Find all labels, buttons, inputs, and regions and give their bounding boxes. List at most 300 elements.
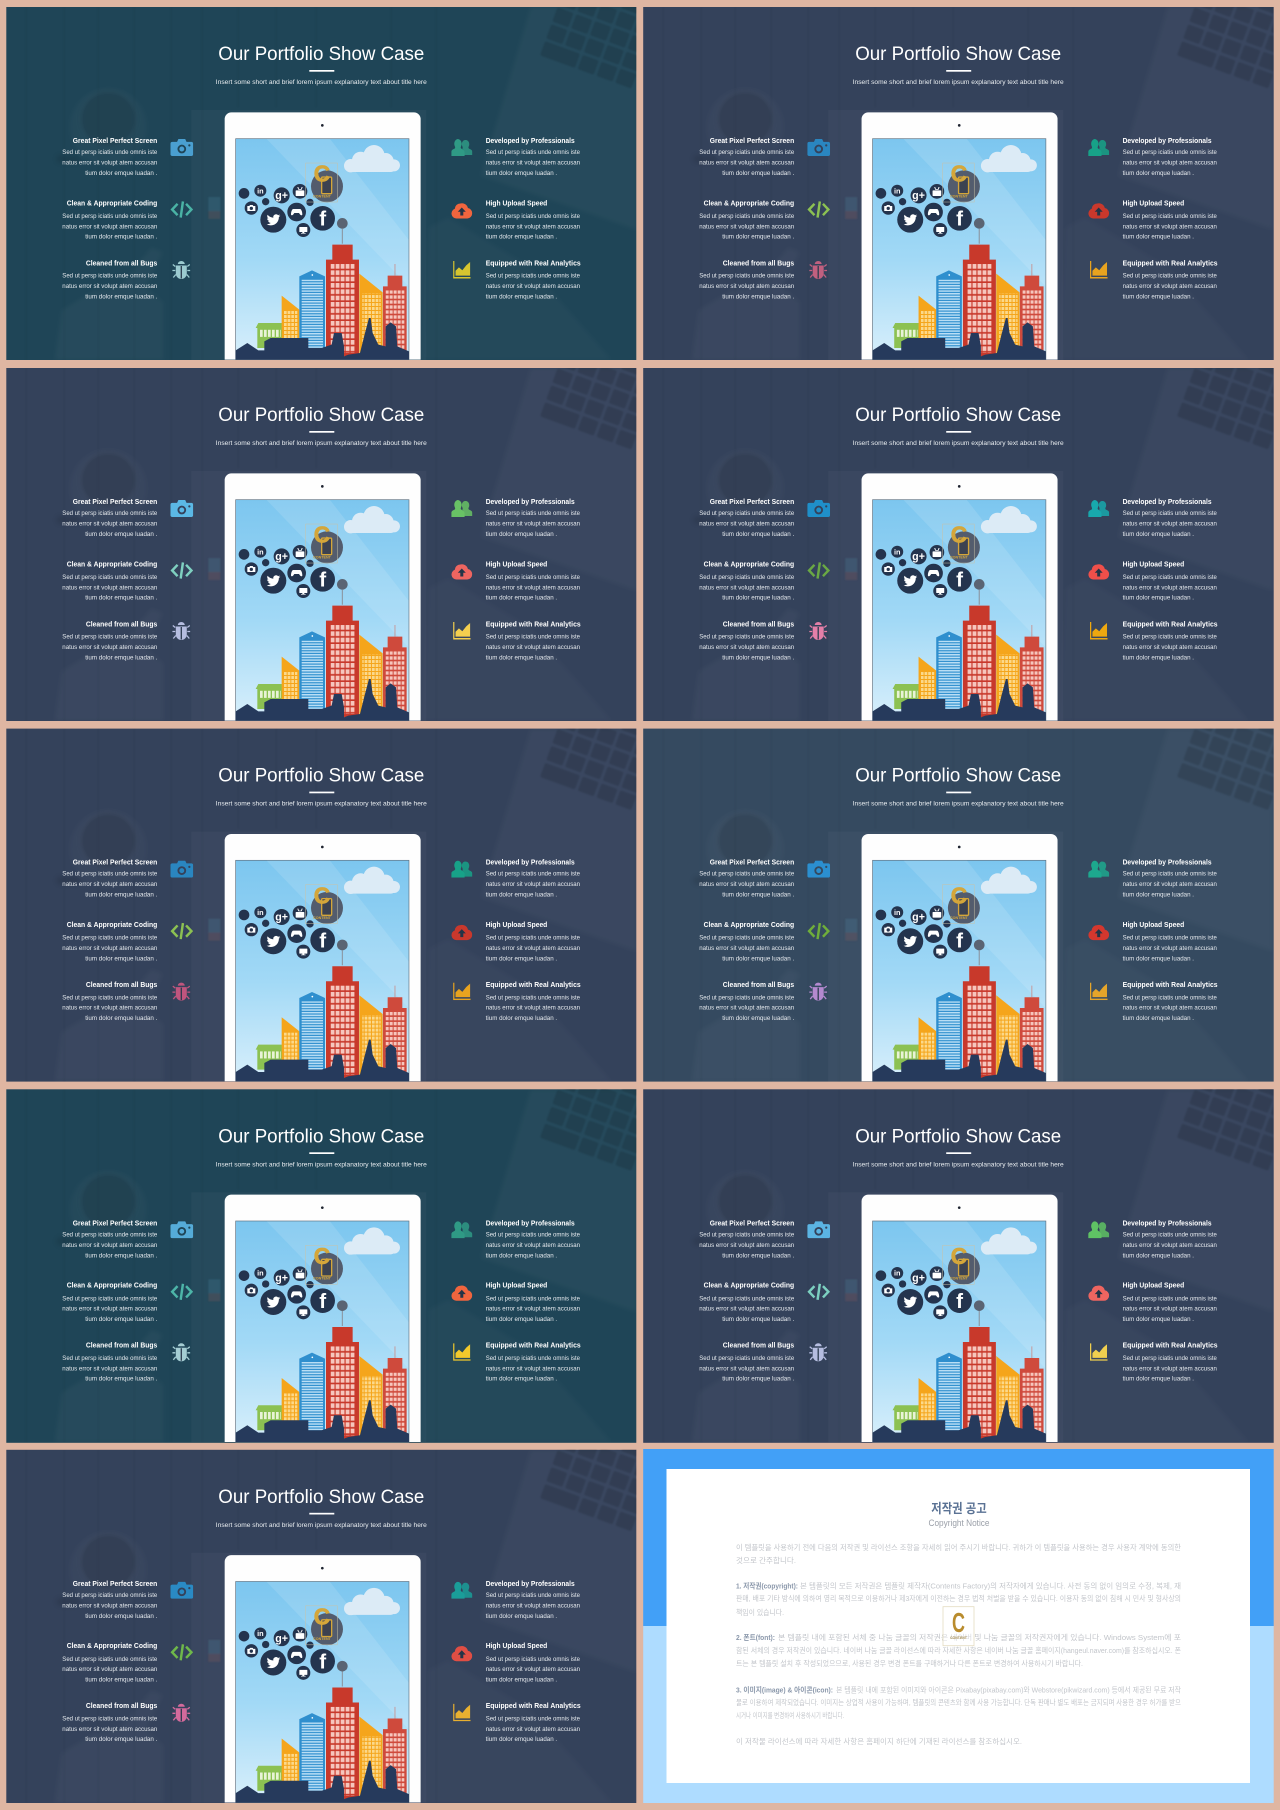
panel: copyright notice [643,1449,1274,1803]
tablet with city illustration: g+ [275,1633,288,1645]
feature: clean coding: Clean & Appropriate Coding [67,1641,158,1650]
feature: pixel perfect screen: tium dolor emque luadan . [85,170,158,177]
title underline [309,792,334,793]
feature: clean coding [699,920,828,962]
title: Our Portfolio Show Case [218,765,424,787]
feature: clean coding: tium dolor emque luadan . [85,1316,158,1323]
title underline [309,70,334,72]
feature: real analytics [1090,258,1218,300]
feature: cleaned from bugs: natus error sit volupt atem accusan [62,1726,158,1733]
feature: clean coding: Clean & Appropriate Coding [704,559,795,568]
panel: slide 3 [6,335,661,721]
feature: cleaned from bugs: Sed ut persp iciatis unde omnis iste [699,634,795,641]
feature: developed by professionals: Developed by Professionals [1123,497,1212,506]
feature: clean coding [62,1641,191,1684]
feature: real analytics [453,1341,581,1383]
feature: pixel perfect screen: Great Pixel Perfect Screen [710,497,795,506]
feature: pixel perfect screen: Great Pixel Perfect Screen [73,1218,158,1227]
tablet with city illustration: in [894,186,901,195]
tablet with city illustration: CONTENT [313,1637,332,1641]
feature: developed by professionals: natus error sit volupt atem accusan [1123,1242,1217,1249]
feature: clean coding: Clean & Appropriate Coding [704,198,795,207]
feature: developed by professionals [451,497,581,538]
notice text: 본 템플릿 내에 포함된 서체 중 나눔 글꼴의 저작권은 네이버 및 나눔 글꼴의 저작권자에게 있습니다. Windows System에 포 [778,1632,1181,1642]
feature: developed by professionals: natus error sit volupt atem accusan [486,520,581,528]
logo watermark: CONTENT [950,1636,968,1640]
feature: cleaned from bugs: Sed ut persp iciatis unde omnis iste [62,273,158,280]
feature: developed by professionals: Sed ut persp iciatis unde omnis iste [486,1592,581,1599]
slide background photo [6,0,661,360]
tablet with city illustration [225,473,421,721]
feature: pixel perfect screen: natus error sit volupt atem accusan [699,881,795,888]
feature: cleaned from bugs: Cleaned from all Bugs [723,1341,794,1350]
feature: real analytics: tium dolor emque luadan . [486,1015,557,1022]
tablet with city illustration: C [951,522,967,548]
feature: cleaned from bugs: tium dolor emque luadan . [722,654,794,661]
tablet with city illustration [225,1195,421,1442]
slide background photo [6,695,661,1082]
feature: cleaned from bugs: Cleaned from all Bugs [86,619,157,628]
title underline [946,792,971,793]
feature: real analytics: tium dolor emque luadan . [1123,1015,1194,1022]
tablet with city illustration: C [314,522,330,548]
feature: pixel perfect screen [699,1218,830,1259]
feature: clean coding [62,198,191,241]
feature: cleaned from bugs: natus error sit volupt atem accusan [62,283,158,290]
tablet with city illustration: CONTENT [313,555,332,559]
tablet with city illustration: in [257,1269,264,1278]
feature: high upload speed: tium dolor emque luadan . [1123,595,1194,602]
feature: high upload speed: tium dolor emque luadan . [486,955,557,962]
feature: cleaned from bugs [699,258,827,300]
tablet with city illustration: g+ [275,912,288,924]
tablet with city illustration: g+ [912,551,925,563]
feature: high upload speed: natus error sit volupt atem accusan [486,1306,581,1313]
panel: slide 4 [643,335,1280,721]
feature: pixel perfect screen: tium dolor emque luadan . [85,531,158,538]
feature: clean coding: natus error sit volupt atem accusan [699,945,795,952]
feature: real analytics: Sed ut persp iciatis unde omnis iste [1123,994,1217,1001]
feature: developed by professionals: Sed ut persp iciatis unde omnis iste [486,149,581,156]
feature: clean coding: natus error sit volupt atem accusan [62,945,158,952]
feature: developed by professionals [451,1218,581,1259]
feature: developed by professionals: Sed ut persp iciatis unde omnis iste [486,1231,581,1238]
feature: clean coding: tium dolor emque luadan . [722,234,794,241]
feature: real analytics: Sed ut persp iciatis unde omnis iste [486,994,581,1001]
feature: clean coding [699,198,828,241]
tablet with city illustration: CONTENT [313,916,332,920]
feature: developed by professionals: tium dolor emque luadan . [1123,1252,1194,1259]
feature: cleaned from bugs: Cleaned from all Bugs [86,258,157,267]
feature: high upload speed: tium dolor emque luadan . [486,1677,557,1684]
tablet with city illustration [862,112,1058,360]
feature: clean coding: natus error sit volupt atem accusan [699,1306,795,1313]
feature: clean coding: Clean & Appropriate Coding [67,920,158,929]
feature: developed by professionals [451,1579,581,1620]
feature: real analytics: Equipped with Real Analytics [1123,619,1218,628]
sub heading: Copyright Notice [928,1518,990,1528]
feature: real analytics: natus error sit volupt atem accusan [486,1005,581,1012]
heading: 저작권 공고 [931,1501,987,1516]
tablet with city illustration: in [257,186,264,195]
feature: pixel perfect screen: natus error sit volupt atem accusan [62,1242,158,1249]
feature: real analytics [1090,980,1218,1022]
feature: high upload speed: natus error sit volupt atem accusan [486,223,581,230]
feature: cleaned from bugs: Sed ut persp iciatis unde omnis iste [699,994,795,1001]
feature: cleaned from bugs: Cleaned from all Bugs [86,980,157,989]
feature: real analytics: Equipped with Real Analytics [1123,258,1218,267]
feature: pixel perfect screen: tium dolor emque luadan . [722,1252,794,1259]
feature: high upload speed: Sed ut persp iciatis unde omnis iste [486,1295,581,1302]
feature: real analytics: Equipped with Real Analytics [1123,1341,1218,1350]
feature: pixel perfect screen: Sed ut persp iciatis unde omnis iste [699,1231,795,1238]
panel: slide 6 [643,695,1280,1082]
tablet with city illustration: C [951,161,967,187]
feature: pixel perfect screen: Sed ut persp iciatis unde omnis iste [62,149,158,156]
feature: pixel perfect screen: natus error sit volupt atem accusan [62,160,158,166]
panel: slide 1 [6,0,661,360]
feature: developed by professionals [451,858,581,899]
feature: developed by professionals: tium dolor emque luadan . [486,531,557,538]
feature: clean coding: Clean & Appropriate Coding [67,559,158,568]
title: Our Portfolio Show Case [218,1125,424,1147]
feature: real analytics: Equipped with Real Analytics [486,258,581,267]
subtitle: Insert some short and brief lorem ipsum explanatory text about title here [216,1522,427,1529]
feature: real analytics [453,258,581,300]
feature: cleaned from bugs: tium dolor emque luadan . [85,293,158,300]
feature: cleaned from bugs: Sed ut persp iciatis unde omnis iste [699,273,795,280]
feature: high upload speed: Sed ut persp iciatis unde omnis iste [486,213,581,220]
feature: developed by professionals: Sed ut persp iciatis unde omnis iste [1123,149,1217,156]
feature: pixel perfect screen: Sed ut persp iciatis unde omnis iste [62,510,158,517]
feature: cleaned from bugs: Cleaned from all Bugs [723,980,794,989]
feature: cleaned from bugs: Sed ut persp iciatis unde omnis iste [62,1355,158,1362]
feature: high upload speed [1088,559,1217,602]
feature: developed by professionals: Developed by Professionals [486,858,575,867]
feature: clean coding: Clean & Appropriate Coding [67,198,158,207]
feature: clean coding [62,920,191,962]
feature: high upload speed: natus error sit volupt atem accusan [1123,945,1217,952]
notice text [736,1542,1181,1746]
tablet with city illustration: in [894,547,901,556]
tablet with city illustration: f [319,1290,326,1313]
tablet with city illustration: C [314,1603,330,1629]
tablet with city illustration: f [956,929,963,952]
feature: real analytics: Equipped with Real Analytics [486,980,581,989]
feature: cleaned from bugs: Sed ut persp iciatis unde omnis iste [62,634,158,641]
feature: high upload speed: tium dolor emque luadan . [1123,234,1194,241]
notice text: 본 템플릿 내에 포함된 이미지와 아이콘은 Pixabay(pixabay.com)와 Webstore(pikwizard.com) 등에서 제공된 무료 저작 [836,1684,1181,1694]
feature: cleaned from bugs: tium dolor emque luadan . [85,1376,158,1383]
tablet with city illustration: in [257,908,264,917]
subtitle: Insert some short and brief lorem ipsum explanatory text about title here [853,440,1064,447]
feature: pixel perfect screen [62,858,193,899]
tablet with city illustration: f [319,1650,326,1673]
feature: clean coding: Sed ut persp iciatis unde omnis iste [62,213,158,220]
feature: real analytics: natus error sit volupt atem accusan [486,283,581,290]
feature: developed by professionals: Sed ut persp iciatis unde omnis iste [1123,871,1217,878]
slide background photo [643,1056,1280,1443]
feature: real analytics: natus error sit volupt atem accusan [486,644,581,651]
feature: developed by professionals: natus error sit volupt atem accusan [486,160,581,166]
feature: pixel perfect screen: Great Pixel Perfect Screen [73,858,158,867]
tablet with city illustration: in [894,1269,901,1278]
notice text: 본 템플릿의 모든 저작권은 템플릿 제작자(Contents Factory)의 저작자에게 있습니다. 사전 동의 없이 임의로 수정, 복제, 재 [800,1580,1181,1590]
feature: developed by professionals: Developed by Professionals [486,1579,575,1588]
feature: cleaned from bugs: natus error sit volupt atem accusan [699,1365,795,1372]
white card [666,1469,1250,1783]
feature: pixel perfect screen: Sed ut persp iciatis unde omnis iste [699,510,795,517]
feature: real analytics [453,619,581,661]
slide background photo [6,1416,661,1803]
feature: real analytics: tium dolor emque luadan . [1123,654,1194,661]
feature: high upload speed [451,559,581,602]
feature: developed by professionals: tium dolor emque luadan . [1123,170,1194,177]
feature: pixel perfect screen: Great Pixel Perfect Screen [73,1579,158,1588]
feature: high upload speed: High Upload Speed [1123,920,1185,929]
feature: pixel perfect screen [62,1579,193,1620]
tablet with city illustration: g+ [275,1272,288,1284]
feature: real analytics: Equipped with Real Analytics [1123,980,1218,989]
tablet with city illustration: f [956,569,963,592]
title underline [309,1513,334,1514]
feature: clean coding: Sed ut persp iciatis unde omnis iste [62,1295,158,1302]
tablet with city illustration: g+ [912,1272,925,1284]
feature: high upload speed: tium dolor emque luadan . [486,1316,557,1323]
feature: high upload speed: tium dolor emque luadan . [1123,1316,1194,1323]
feature: cleaned from bugs: Sed ut persp iciatis unde omnis iste [62,1716,158,1723]
feature: pixel perfect screen [699,858,830,899]
feature: real analytics: tium dolor emque luadan . [1123,293,1194,300]
feature: pixel perfect screen: tium dolor emque luadan . [722,892,794,899]
subtitle: Insert some short and brief lorem ipsum explanatory text about title here [853,801,1064,808]
tablet with city illustration: C [314,882,330,908]
feature: cleaned from bugs: tium dolor emque luadan . [85,1736,158,1743]
feature: clean coding: Clean & Appropriate Coding [67,1281,158,1290]
feature: high upload speed [451,1641,581,1684]
feature: developed by professionals: Developed by Professionals [1123,136,1212,145]
tablet with city illustration: in [257,1629,264,1638]
feature: cleaned from bugs: tium dolor emque luadan . [722,293,794,300]
notice text: 책임이 있습니다. [736,1607,784,1617]
feature: clean coding [699,1281,828,1323]
slide background photo [643,335,1280,721]
notice text: 이 템플릿을 사용하기 전에 다음의 저작권 및 라이선스 조항을 자세히 읽어 주시기 바랍니다. 귀하가 이 템플릿을 사용하는 경우 사용자 계약에 동의한 [736,1542,1181,1552]
feature: cleaned from bugs [62,258,190,300]
tablet with city illustration: CONTENT [950,194,968,198]
feature: high upload speed: tium dolor emque luadan . [486,595,557,602]
feature: cleaned from bugs: Cleaned from all Bugs [723,258,794,267]
feature: pixel perfect screen: tium dolor emque luadan . [85,892,158,899]
feature: developed by professionals: natus error sit volupt atem accusan [1123,160,1217,166]
feature: developed by professionals: natus error sit volupt atem accusan [486,1602,581,1609]
tablet with city illustration: C [314,161,330,187]
feature: cleaned from bugs: Cleaned from all Bugs [723,619,794,628]
feature: cleaned from bugs [62,1341,190,1383]
feature: pixel perfect screen: tium dolor emque luadan . [85,1252,158,1259]
logo watermark [943,1607,974,1646]
feature: high upload speed: Sed ut persp iciatis unde omnis iste [1123,574,1217,581]
panel: slide 9 [6,1416,661,1803]
feature: pixel perfect screen: Sed ut persp iciatis unde omnis iste [699,149,795,156]
feature: pixel perfect screen: Sed ut persp iciatis unde omnis iste [62,871,158,878]
feature: high upload speed: Sed ut persp iciatis unde omnis iste [486,574,581,581]
feature: developed by professionals: tium dolor emque luadan . [1123,531,1194,538]
feature: cleaned from bugs [62,1701,190,1743]
feature: pixel perfect screen: Great Pixel Perfect Screen [73,497,158,506]
notice text: 2. 폰트(font): [736,1633,775,1642]
feature: high upload speed [1088,920,1217,962]
tablet with city illustration [862,1195,1058,1442]
feature: real analytics: natus error sit volupt atem accusan [486,1365,581,1372]
feature: developed by professionals: Developed by Professionals [486,136,575,145]
feature: pixel perfect screen: natus error sit volupt atem accusan [62,881,158,888]
feature: high upload speed [451,1281,581,1323]
feature: real analytics: Sed ut persp iciatis unde omnis iste [486,273,581,280]
slide background photo [6,1056,661,1443]
feature: clean coding: tium dolor emque luadan . [85,595,158,602]
feature: real analytics: natus error sit volupt atem accusan [486,1726,581,1733]
feature: cleaned from bugs: tium dolor emque luadan . [85,654,158,661]
feature: real analytics [453,1701,581,1743]
tablet with city illustration: g+ [912,190,925,202]
notice text: 3. 이미지(image) & 아이콘(icon): [736,1684,833,1694]
feature: real analytics: tium dolor emque luadan . [486,654,557,661]
feature: pixel perfect screen: natus error sit volupt atem accusan [699,160,795,166]
slide background photo [643,695,1280,1082]
subtitle: Insert some short and brief lorem ipsum explanatory text about title here [853,79,1064,86]
feature: real analytics: Sed ut persp iciatis unde omnis iste [486,1716,581,1723]
feature: clean coding: tium dolor emque luadan . [85,234,158,241]
feature: high upload speed: High Upload Speed [486,559,548,568]
tablet with city illustration [225,112,421,360]
feature: high upload speed: natus error sit volupt atem accusan [1123,1306,1217,1313]
feature: clean coding: tium dolor emque luadan . [85,1677,158,1684]
title underline [309,431,334,433]
notice text: 것으로 간주합니다. [736,1555,796,1565]
feature: developed by professionals: tium dolor emque luadan . [486,1252,557,1259]
feature: developed by professionals: Sed ut persp iciatis unde omnis iste [1123,510,1217,517]
feature: clean coding: tium dolor emque luadan . [85,955,158,962]
feature: cleaned from bugs: Cleaned from all Bugs [86,1701,157,1710]
feature: clean coding: Clean & Appropriate Coding [704,920,795,929]
title: Our Portfolio Show Case [855,43,1061,65]
feature: real analytics: natus error sit volupt atem accusan [1123,1005,1217,1012]
feature: cleaned from bugs: tium dolor emque luadan . [85,1015,158,1022]
title underline [309,1152,334,1154]
feature: real analytics [453,980,581,1022]
subtitle: Insert some short and brief lorem ipsum explanatory text about title here [216,1161,427,1168]
feature: real analytics: Equipped with Real Analytics [486,1701,581,1710]
feature: cleaned from bugs: Sed ut persp iciatis unde omnis iste [699,1355,795,1362]
feature: high upload speed [1088,1281,1217,1323]
feature: high upload speed [451,920,581,962]
feature: real analytics: tium dolor emque luadan . [486,293,557,300]
notice text: 물로 이용하여 제작되었습니다. 이미지는 상업적 사용이 가능하며, 템플릿의 콘텐츠와 함께 사용 가능합니다. 단독 판매나 별도 배포는 금지되며 사용한 경우 허가를 받으 [736,1697,1181,1707]
feature: real analytics: natus error sit volupt atem accusan [1123,283,1217,290]
feature: pixel perfect screen [62,497,193,538]
feature: high upload speed [1088,198,1217,241]
feature: developed by professionals: Developed by Professionals [1123,1218,1212,1227]
feature: cleaned from bugs: Sed ut persp iciatis unde omnis iste [62,994,158,1001]
feature: high upload speed: Sed ut persp iciatis unde omnis iste [486,935,581,942]
notice text: 함된 서체의 경우 저작권이 있습니다. 네이버 나눔 글꼴 라이선스에 따라 자세한 사항은 네이버 나눔 글꼴 홈페이지(hangeul.naver.com)를 참조하십시오. 폰 [736,1645,1181,1655]
feature: cleaned from bugs [62,619,190,661]
feature: cleaned from bugs [699,1341,827,1383]
feature: real analytics: tium dolor emque luadan . [486,1736,557,1743]
feature: clean coding: Sed ut persp iciatis unde omnis iste [62,574,158,581]
feature: clean coding: natus error sit volupt atem accusan [699,584,795,591]
feature: clean coding: Sed ut persp iciatis unde omnis iste [699,935,795,942]
feature: real analytics: Equipped with Real Analytics [486,1341,581,1350]
subtitle: Insert some short and brief lorem ipsum explanatory text about title here [216,801,427,808]
tablet with city illustration: f [319,208,326,231]
feature: pixel perfect screen: Sed ut persp iciatis unde omnis iste [62,1231,158,1238]
feature: high upload speed: High Upload Speed [1123,1281,1185,1290]
feature: developed by professionals [1088,136,1217,177]
feature: cleaned from bugs: natus error sit volupt atem accusan [62,1005,158,1012]
feature: pixel perfect screen: natus error sit volupt atem accusan [62,520,158,528]
tablet with city illustration: g+ [275,551,288,563]
panel: slide 8 [643,1056,1280,1443]
feature: clean coding [62,559,191,602]
feature: developed by professionals: Developed by Professionals [1123,858,1212,867]
tablet with city illustration [862,834,1058,1081]
feature: pixel perfect screen: Great Pixel Perfect Screen [710,1218,795,1227]
feature: high upload speed: natus error sit volupt atem accusan [1123,584,1217,591]
feature: clean coding: natus error sit volupt atem accusan [699,223,795,230]
feature: pixel perfect screen: natus error sit volupt atem accusan [62,1602,158,1609]
feature: real analytics: tium dolor emque luadan . [1123,1376,1194,1383]
title underline [946,1152,971,1154]
feature: developed by professionals: natus error sit volupt atem accusan [1123,881,1217,888]
feature: clean coding: tium dolor emque luadan . [722,1316,794,1323]
feature: real analytics: Sed ut persp iciatis unde omnis iste [1123,634,1217,641]
feature: high upload speed [451,198,581,241]
feature: pixel perfect screen: natus error sit volupt atem accusan [699,520,795,528]
tablet with city illustration: CONTENT [950,916,968,920]
feature: high upload speed: Sed ut persp iciatis unde omnis iste [1123,213,1217,220]
feature: high upload speed: natus error sit volupt atem accusan [1123,223,1217,230]
feature: pixel perfect screen: Great Pixel Perfect Screen [710,136,795,145]
feature: clean coding: Clean & Appropriate Coding [704,1281,795,1290]
feature: real analytics: natus error sit volupt atem accusan [1123,644,1217,651]
title: Our Portfolio Show Case [218,404,424,426]
tablet with city illustration [225,1555,421,1802]
feature: high upload speed: Sed ut persp iciatis unde omnis iste [486,1656,581,1663]
tablet with city illustration: C [951,1243,967,1269]
feature: developed by professionals: natus error sit volupt atem accusan [486,1242,581,1249]
feature: clean coding: tium dolor emque luadan . [722,595,794,602]
feature: real analytics: Sed ut persp iciatis unde omnis iste [1123,273,1217,280]
feature: developed by professionals: Sed ut persp iciatis unde omnis iste [486,510,581,517]
tablet with city illustration [862,473,1058,721]
feature: pixel perfect screen: tium dolor emque luadan . [85,1613,158,1620]
feature: cleaned from bugs: tium dolor emque luadan . [722,1015,794,1022]
feature: high upload speed: High Upload Speed [1123,198,1185,207]
feature: developed by professionals [1088,858,1217,899]
feature: pixel perfect screen: Great Pixel Perfect Screen [710,858,795,867]
feature: cleaned from bugs: tium dolor emque luadan . [722,1376,794,1383]
feature: clean coding: Sed ut persp iciatis unde omnis iste [62,935,158,942]
feature: developed by professionals [451,136,581,177]
feature: real analytics: tium dolor emque luadan . [486,1376,557,1383]
feature: clean coding [699,559,828,602]
tablet with city illustration: CONTENT [950,1277,968,1281]
feature: pixel perfect screen [62,1218,193,1259]
feature: pixel perfect screen [699,497,830,538]
feature: cleaned from bugs: natus error sit volupt atem accusan [62,1365,158,1372]
